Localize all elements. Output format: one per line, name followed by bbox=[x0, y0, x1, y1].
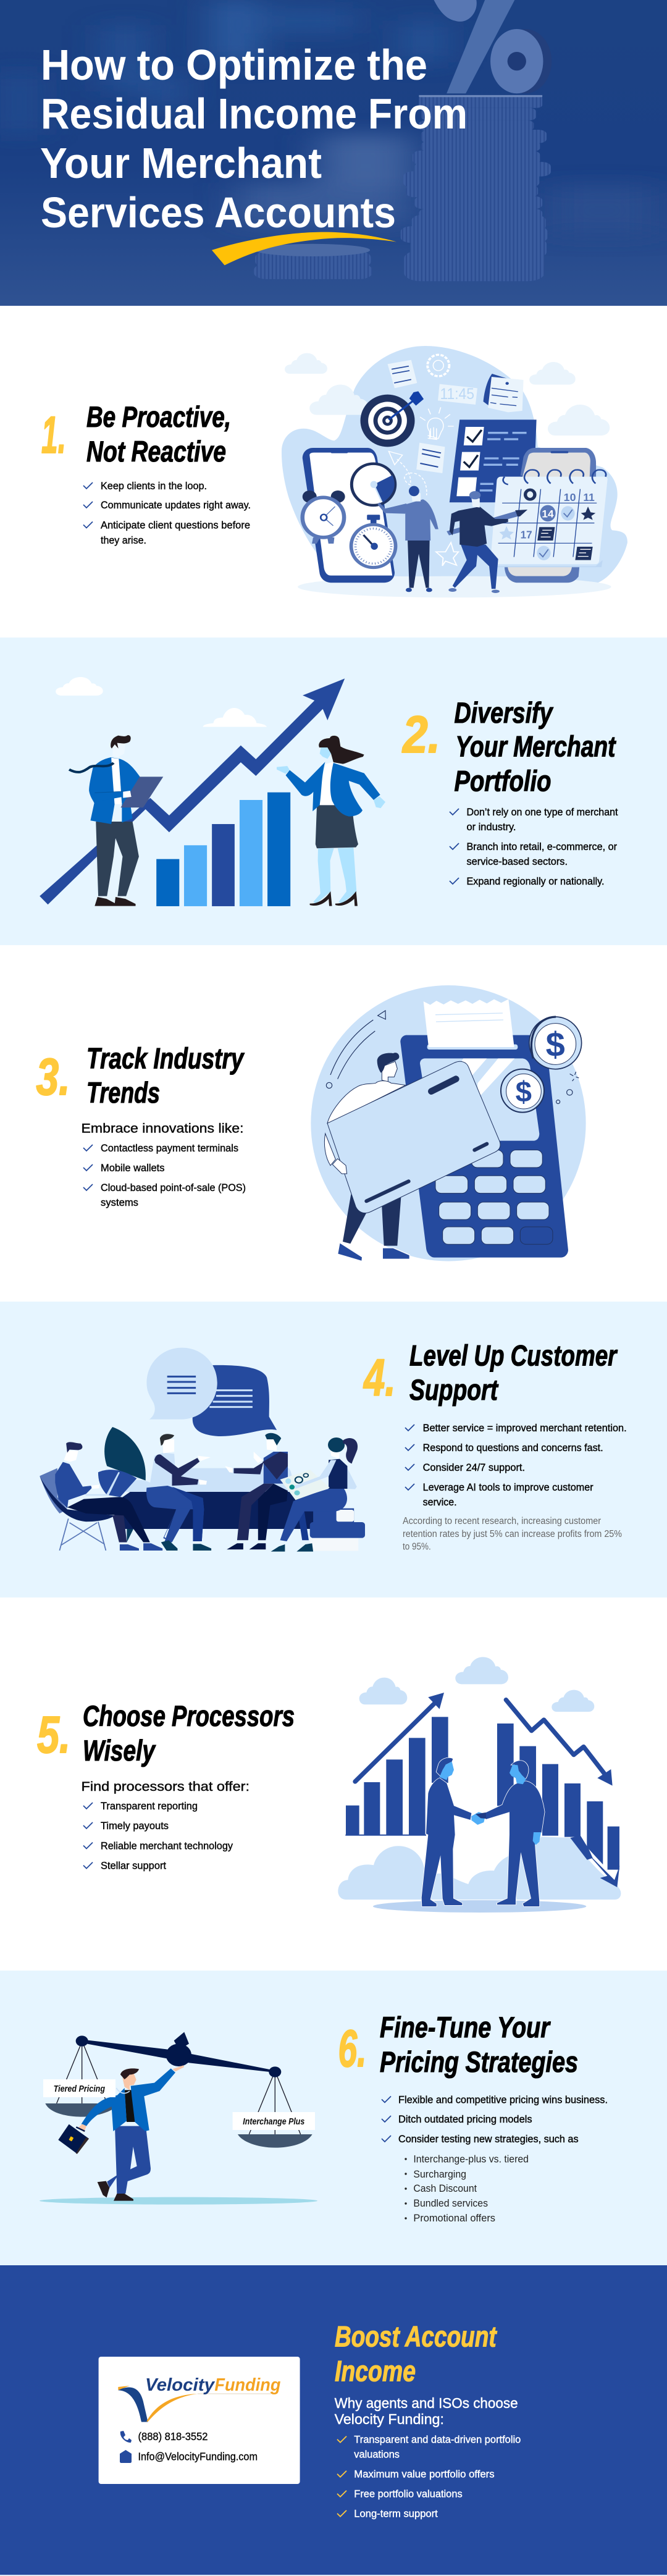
checklist 3: systems bbox=[101, 1197, 138, 1208]
speech bubble dark bbox=[193, 1365, 277, 1436]
illustration: planning scene with phones, clock, calendar: 14 bbox=[542, 508, 554, 520]
logo: velocity funding: Velocity bbox=[145, 2375, 216, 2395]
sub bullets 6: Surcharging bbox=[413, 2169, 466, 2180]
heading 6: Fine-Tune Your bbox=[380, 2011, 551, 2044]
illustration: planning scene with phones, clock, calendar: 11 bbox=[583, 491, 595, 503]
yellow swoosh under title bbox=[212, 232, 396, 265]
icon: checklist board bbox=[450, 419, 537, 502]
payment terminal bbox=[400, 1035, 568, 1258]
checklist 5: Timely payouts bbox=[101, 1820, 169, 1832]
person four with tablet bbox=[271, 1437, 358, 1552]
heading 1: Not Reactive bbox=[86, 435, 226, 468]
checklist 6: Ditch outdated pricing models bbox=[398, 2114, 532, 2125]
heading 2 bbox=[455, 696, 616, 797]
checklist 6: Flexible and competitive pricing wins business. bbox=[398, 2094, 608, 2105]
man with tablet bbox=[69, 735, 163, 906]
checklist: footer benefits bbox=[337, 2435, 521, 2520]
checklist 4 bbox=[405, 1423, 627, 1508]
number 4: 4. bbox=[363, 1349, 395, 1407]
credit card bbox=[327, 1061, 500, 1213]
contact card bbox=[99, 2357, 300, 2484]
sub bullets 6 bbox=[405, 2154, 529, 2224]
checklist 5 bbox=[83, 1801, 233, 1872]
checklist 4: Leverage AI tools to improve customer bbox=[423, 1482, 594, 1493]
icon: digital clock bbox=[438, 384, 477, 405]
sofa bbox=[98, 1468, 340, 1529]
header photo: blurred coin stacks and percent sign bbox=[0, 0, 655, 281]
sub bullets 6: Promotional offers bbox=[413, 2213, 495, 2224]
illustration: planning scene with phones, clock, calendar: 11:45 bbox=[440, 385, 474, 403]
icon: sticky notes bbox=[388, 360, 417, 388]
subheading: why agents: Why agents and ISOs choose bbox=[335, 2395, 518, 2411]
checklist 5: Transparent reporting bbox=[101, 1801, 198, 1812]
heading 1 bbox=[86, 400, 231, 468]
icon: phone bbox=[120, 2431, 132, 2443]
icon: target with arrow bbox=[361, 395, 415, 447]
person on chair with laptop bbox=[55, 1442, 162, 1551]
heading: boost account income: Income bbox=[335, 2355, 416, 2388]
checklist 6: Consider testing new strategies, such as bbox=[398, 2134, 579, 2145]
checklist 2 bbox=[450, 807, 618, 887]
person three talking bbox=[225, 1433, 288, 1549]
checklist 1: Communicate updates right away. bbox=[101, 500, 251, 511]
panel: section 4 customer support bbox=[0, 1302, 667, 1597]
title: Residual Income From bbox=[41, 90, 468, 138]
scale beam bbox=[76, 2032, 281, 2077]
person pointing at gauge bbox=[377, 486, 438, 592]
checklist: footer benefits: valuations bbox=[354, 2449, 400, 2460]
terminal keys bbox=[435, 1150, 553, 1244]
email address: Info@VelocityFunding.com bbox=[138, 2450, 258, 2462]
heading: boost account income: Boost Account bbox=[335, 2320, 498, 2353]
panel: section 5 choose processors bbox=[0, 1597, 667, 1971]
subheading 5: Find processors that offer: bbox=[82, 1780, 250, 1794]
heading 5 bbox=[83, 1699, 295, 1767]
icon: phone right bbox=[521, 448, 596, 478]
label: interchange plus bbox=[233, 2112, 315, 2130]
panel: footer call to action bbox=[0, 2265, 667, 2575]
logo: velocity funding bbox=[118, 2375, 281, 2422]
heading 1: Be Proactive, bbox=[86, 400, 231, 433]
number 5: 5. bbox=[37, 1706, 70, 1764]
checklist 5: Reliable merchant technology bbox=[101, 1841, 233, 1852]
man right bbox=[485, 1761, 545, 1906]
checklist 3: Cloud-based point-of-sale (POS) bbox=[101, 1182, 246, 1193]
checklist: footer benefits: Free portfolio valuations bbox=[354, 2489, 463, 2500]
illustration: card and payment terminal bbox=[311, 985, 586, 1261]
research note: According to recent research, increasing customer bbox=[403, 1516, 601, 1526]
coin large bbox=[529, 1017, 582, 1069]
subheading: why agents: Velocity Funding: bbox=[335, 2411, 444, 2427]
illustration: planning scene with phones, clock, calendar bbox=[282, 346, 627, 597]
clouds bbox=[56, 677, 267, 727]
number 3: 3. bbox=[36, 1048, 70, 1106]
icon: alarm clock bbox=[303, 490, 317, 503]
checklist 3: Contactless payment terminals bbox=[101, 1143, 238, 1154]
checklist 6 bbox=[382, 2094, 608, 2145]
rising arrow bbox=[40, 678, 345, 904]
checklist 1 bbox=[83, 481, 251, 546]
title: How to Optimize the bbox=[41, 41, 427, 89]
label: interchange plus: Interchange Plus bbox=[243, 2116, 304, 2127]
checklist 2: Don’t rely on one type of merchant bbox=[467, 807, 618, 818]
icon: stopwatch bbox=[367, 515, 380, 520]
receipt bbox=[424, 999, 514, 1047]
checklist 5: Stellar support bbox=[101, 1861, 166, 1872]
illustration: handshake with rising and falling charts bbox=[338, 1657, 621, 1913]
heading 5: Wisely bbox=[83, 1734, 156, 1767]
logo: velocity funding: Funding bbox=[214, 2375, 281, 2395]
heading 2: Diversify bbox=[455, 696, 554, 729]
rising bars and arrow bbox=[345, 1693, 448, 1836]
heading 3 bbox=[86, 1042, 245, 1109]
decorative marks bbox=[326, 1011, 579, 1104]
number 6: 6. bbox=[338, 2019, 367, 2077]
chair bbox=[40, 1468, 115, 1551]
man left in suit bbox=[422, 1758, 471, 1906]
heading 4: Support bbox=[409, 1373, 499, 1406]
sub bullets 6: Cash Discount bbox=[413, 2183, 477, 2194]
checklist: footer benefits: Long-term support bbox=[354, 2509, 438, 2520]
speech bubble light bbox=[146, 1348, 217, 1420]
coin small: $ bbox=[516, 1075, 532, 1108]
number 1: 1. bbox=[41, 406, 66, 464]
panel: section 3 track trends bbox=[0, 945, 667, 1302]
title: Services Accounts bbox=[41, 188, 396, 237]
books bbox=[310, 1509, 365, 1551]
coin small bbox=[501, 1069, 544, 1113]
checklist 4: Consider 24/7 support. bbox=[423, 1462, 525, 1473]
checklist 2: service-based sectors. bbox=[467, 856, 568, 867]
label: tiered pricing: Tiered Pricing bbox=[54, 2084, 105, 2094]
scale strings and pans bbox=[45, 2046, 313, 2148]
heading 2: Portfolio bbox=[455, 765, 551, 797]
checklist 3: Mobile wallets bbox=[101, 1163, 164, 1174]
research note: to 95%. bbox=[403, 1542, 431, 1552]
title: Your Merchant bbox=[40, 139, 322, 187]
icon: bulb bbox=[420, 407, 454, 440]
terminal screen bbox=[420, 1058, 539, 1141]
sub bullets 6: Interchange-plus vs. tiered bbox=[413, 2154, 529, 2165]
subheading 3: Embrace innovations like: bbox=[82, 1121, 243, 1135]
bar chart bbox=[156, 793, 290, 906]
checklist 1: Anticipate client questions before bbox=[101, 520, 250, 531]
icon: envelope bbox=[120, 2450, 132, 2463]
coin large: $ bbox=[546, 1025, 565, 1064]
panel: section 1 be proactive bbox=[0, 306, 667, 638]
icon: gauge bbox=[351, 464, 395, 505]
woman gesturing bbox=[277, 736, 385, 906]
heading 4: Level Up Customer bbox=[409, 1339, 618, 1371]
icon: pinned note bbox=[484, 374, 507, 408]
checklist 4: Better service = improved merchant retention. bbox=[423, 1423, 627, 1434]
person with pencil bbox=[447, 491, 527, 593]
checklist: footer benefits: Maximum value portfolio offers bbox=[354, 2469, 495, 2480]
illustration: man balancing pricing scale bbox=[40, 2032, 317, 2205]
handshake hands bbox=[471, 1812, 486, 1825]
research note bbox=[403, 1516, 622, 1552]
heading 3: Trends bbox=[86, 1076, 160, 1109]
heading 6 bbox=[380, 2011, 578, 2078]
checklist 2: Branch into retail, e-commerce, or bbox=[467, 841, 617, 852]
heading 6: Pricing Strategies bbox=[380, 2045, 578, 2078]
checklist 1: Keep clients in the loop. bbox=[101, 481, 207, 492]
checklist 1: they arise. bbox=[101, 535, 146, 546]
checklist 3 bbox=[83, 1143, 246, 1208]
illustration: planning scene with phones, clock, calendar: 17 bbox=[521, 529, 532, 541]
heading 2: Your Merchant bbox=[456, 730, 616, 762]
label: tiered pricing bbox=[43, 2079, 115, 2097]
sub bullets 6: Bundled services bbox=[413, 2198, 488, 2209]
phone number: (888) 818-3552 bbox=[138, 2430, 208, 2443]
leaf plant bbox=[104, 1427, 146, 1481]
checklist 4: service. bbox=[423, 1497, 457, 1508]
illustration: team meeting on sofa bbox=[40, 1348, 365, 1552]
icon: calendar bbox=[492, 560, 603, 567]
checklist: footer benefits: Transparent and data-driven portfolio bbox=[354, 2435, 521, 2446]
icon: paper plane bbox=[388, 452, 403, 465]
number 2: 2. bbox=[401, 705, 440, 764]
illustration: growth chart with two business people bbox=[40, 677, 385, 906]
subheading: why agents bbox=[335, 2395, 518, 2427]
research note: retention rates by just 5% can increase profits from 25% bbox=[403, 1529, 622, 1539]
falling bars and arrow bbox=[497, 1724, 619, 1887]
panel: section 6 pricing strategies bbox=[0, 1971, 667, 2265]
icon: gear outline bbox=[427, 355, 449, 376]
checklist 2: or industry. bbox=[467, 822, 516, 833]
checklist 4: Respond to questions and concerns fast. bbox=[423, 1442, 603, 1454]
heading: boost account income bbox=[335, 2320, 498, 2388]
heading 4 bbox=[409, 1339, 618, 1406]
person carrying card bbox=[324, 1053, 409, 1261]
panel: header bbox=[0, 0, 667, 306]
panel: section 2 diversify bbox=[0, 638, 667, 945]
man holding scale bbox=[58, 2065, 184, 2201]
checklist 2: Expand regionally or nationally. bbox=[467, 876, 604, 887]
clouds bbox=[285, 353, 610, 436]
clouds bbox=[338, 1657, 621, 1900]
icon: phone left bbox=[303, 448, 395, 583]
title bbox=[40, 41, 468, 237]
illustration: planning scene with phones, clock, calendar: 10 bbox=[564, 491, 576, 503]
heading 5: Choose Processors bbox=[83, 1699, 295, 1732]
heading 3: Track Industry bbox=[86, 1042, 245, 1075]
person two talking bbox=[146, 1434, 211, 1551]
